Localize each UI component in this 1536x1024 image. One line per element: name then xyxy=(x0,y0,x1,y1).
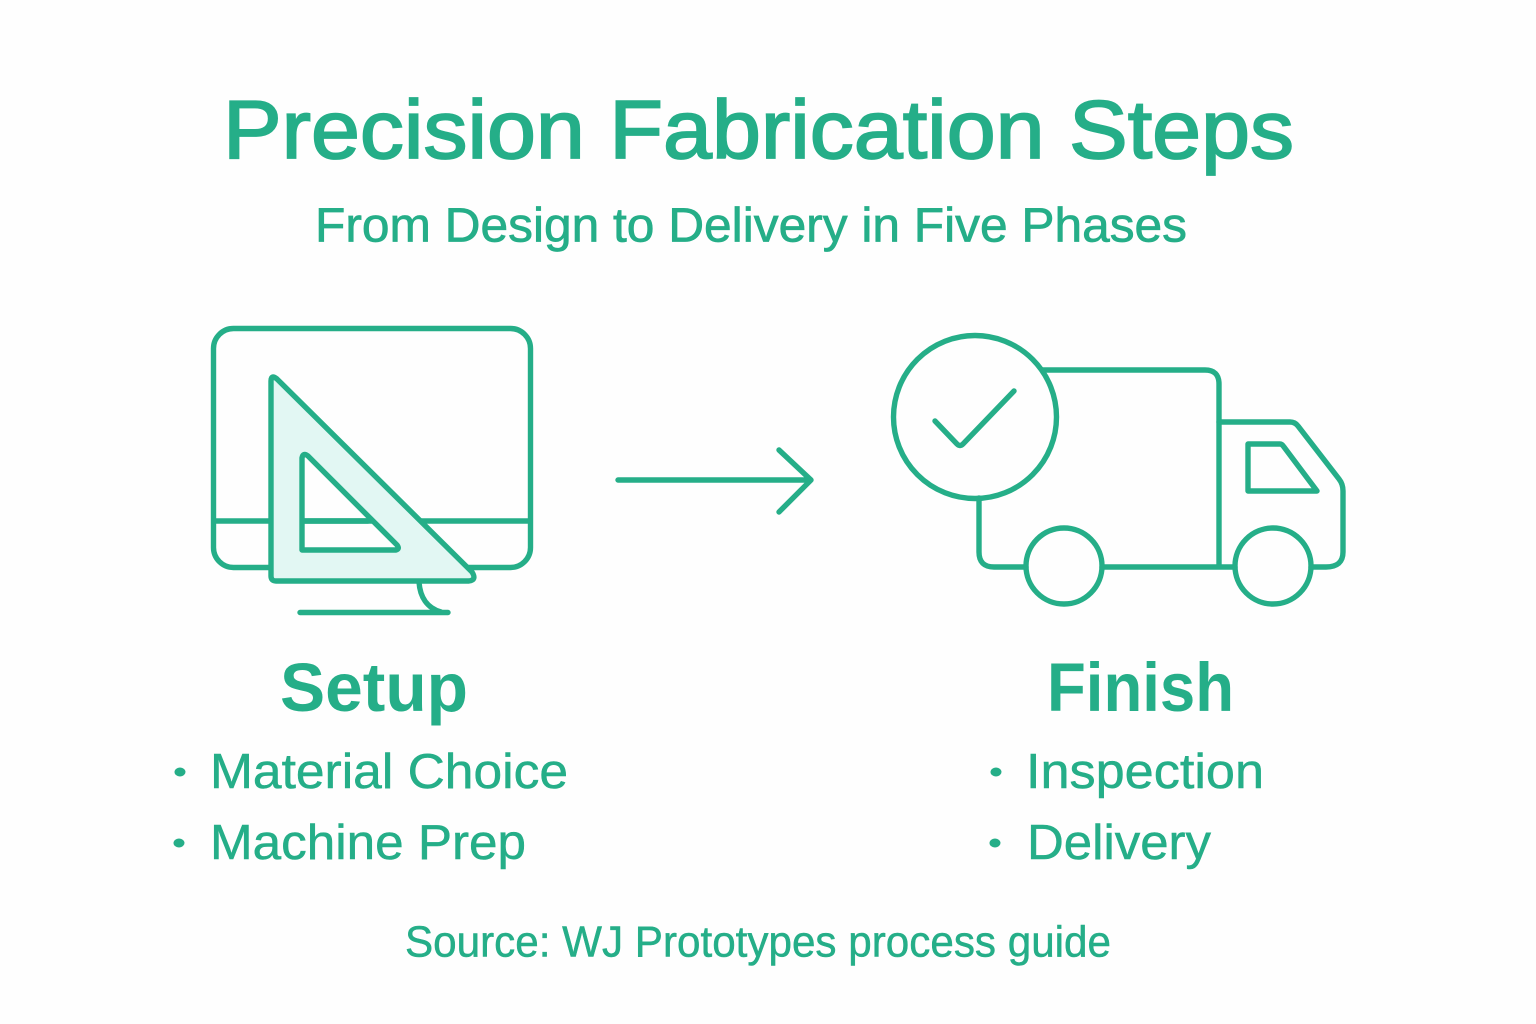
icon: delivery truck with check badge xyxy=(894,336,1343,604)
icon: monitor with set square xyxy=(214,328,530,612)
bullet xyxy=(174,768,186,776)
item: Delivery: Delivery xyxy=(1027,816,1212,870)
monitor chin divider xyxy=(214,518,530,524)
source note: Source: WJ Prototypes process guide xyxy=(405,918,1111,966)
list: setup items xyxy=(174,745,568,870)
item: Machine Prep: Machine Prep xyxy=(210,816,526,870)
check mark xyxy=(935,391,1014,446)
cab window xyxy=(1248,444,1317,491)
chin line seen through set square cut-out xyxy=(303,518,368,524)
heading: Setup: Setup xyxy=(280,649,468,726)
heading: Finish: Finish xyxy=(1047,649,1234,726)
item: Material Choice: Material Choice xyxy=(210,745,568,799)
monitor body xyxy=(214,328,530,568)
bullet xyxy=(174,838,184,848)
check badge circle xyxy=(894,336,1056,498)
truck cab xyxy=(1219,422,1343,567)
title: Precision Fabrication Steps xyxy=(223,83,1294,176)
truck cargo box xyxy=(979,370,1235,567)
list: finish items xyxy=(990,745,1264,870)
rear wheel xyxy=(1026,528,1102,604)
item: Inspection: Inspection xyxy=(1026,745,1264,799)
bullet xyxy=(990,838,1000,848)
monitor stand xyxy=(300,582,448,612)
front wheel xyxy=(1235,528,1311,604)
subtitle: From Design to Delivery in Five Phases xyxy=(315,200,1187,252)
bullet xyxy=(990,768,1002,776)
set square xyxy=(271,377,474,581)
arrow xyxy=(618,450,811,512)
